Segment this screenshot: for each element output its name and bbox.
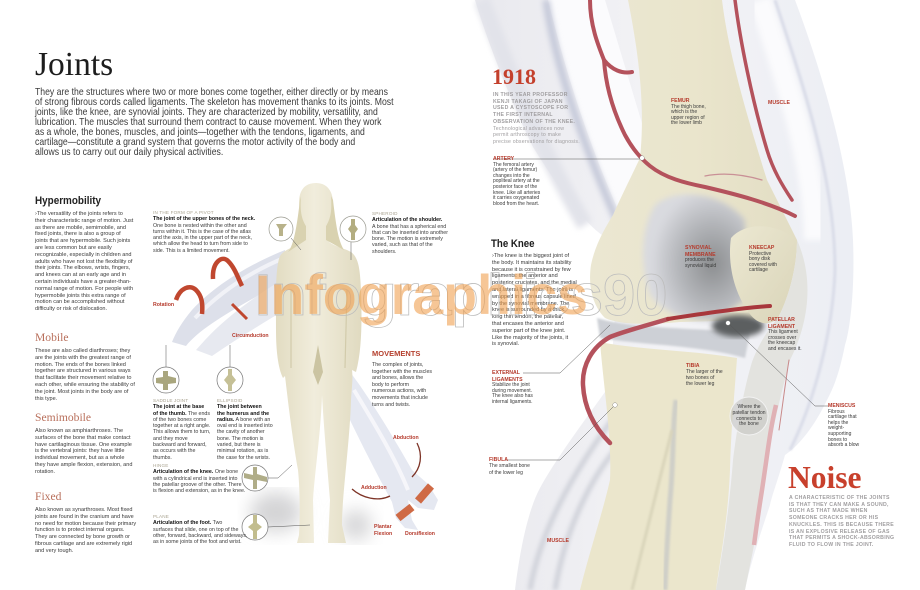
icon: plane joint circle	[242, 514, 268, 540]
label: tendon callout: the bone	[739, 421, 759, 427]
label: artery: ARTERY	[493, 156, 514, 162]
text: Hypermobility: their characteristic range of motion. Just	[35, 218, 133, 224]
label: artery	[493, 156, 540, 207]
text: ellipsoid joint: the humerus and the	[217, 411, 269, 417]
text: The Knee: Like the majority of the joints, it	[492, 335, 568, 341]
text: spheroid joint: A bone that has a spherical end	[372, 224, 446, 230]
text: Hypermobility: their joints. The elbows, wrists, fingers,	[35, 265, 130, 271]
text: The Knee: by the synovial membrane. The	[492, 301, 569, 307]
text: pivot joint: One bone is nested within the other and	[153, 223, 247, 229]
text: saddle joint: This allows them to turn,	[153, 429, 210, 435]
label: external ligaments: Stabilize the joint	[492, 382, 530, 388]
label: meniscus: supporting	[828, 431, 851, 437]
text: Semimobile: Also known as amphiarthroses. The	[35, 428, 123, 434]
text: plane joint: as in some joints of the foot and wrist.	[153, 539, 242, 545]
text: Hypermobility: adults who have not lost the flexibility of	[35, 259, 132, 265]
leaders	[166, 238, 351, 527]
label: tendon callout: patellar tendon	[732, 410, 766, 416]
text: ellipsoid joint: varied, but there is	[217, 442, 261, 448]
text: Movements: together with the muscles	[372, 369, 432, 375]
knee: arteries	[583, 0, 795, 443]
label: kneecap	[749, 245, 777, 273]
text: hinge joint: Articulation of the knee. One bone	[153, 469, 238, 475]
text: ellipsoid joint: bone. The motion is	[217, 436, 263, 442]
text: The Knee: and lateral ligaments. The joint is	[492, 287, 573, 293]
label: femur	[671, 98, 706, 126]
title: Joints	[35, 46, 113, 83]
icon: hinge joint circle	[242, 465, 268, 491]
text: Semimobile: have cartilaginous tissue. One example	[35, 442, 132, 448]
label: patellar ligament	[768, 317, 802, 352]
text: Hypermobility: normal range of motion. For people with	[35, 286, 133, 292]
text: Hypermobility: certain individuals have a greater-than-	[35, 279, 131, 285]
label: meniscus: helps the	[828, 420, 848, 426]
text: 1918	[493, 92, 580, 145]
text: Mobile: These are also called diarthroses; they	[35, 348, 130, 354]
label: synovial membrane: MEMBRANE	[685, 252, 716, 258]
label: tibia: The larger of the	[686, 369, 723, 375]
icon: spheroid joint circle	[340, 216, 366, 242]
label: femur: which is the	[671, 109, 697, 115]
text: saddle joint: of the two bones come	[153, 417, 206, 423]
text: 1918: KENJI TAKAGI OF JAPAN	[493, 99, 563, 105]
intro text: joints, like the knee, are synovial joints. They are characterized by mobility, versatility, and	[35, 106, 378, 118]
text: The Knee: superior part of the knee joint.	[492, 328, 565, 334]
label: patellar ligament: and encases it.	[768, 346, 802, 352]
text: Fixed: Also known as synarthroses. Most fixed	[35, 507, 132, 513]
heading: The Knee: The Knee	[491, 238, 535, 250]
label: artery: changes into the	[493, 173, 530, 179]
text: 1918: Technological advances now	[493, 126, 564, 132]
label: meniscus: absorb a blow	[828, 442, 859, 448]
intro text: as a whole, the bones, muscles, and joints—together with the tendons, ligaments, and	[35, 126, 365, 138]
text: The Knee: wrapped in a fibrous capsule lined	[492, 294, 576, 300]
label: kneecap: covered with	[749, 262, 777, 268]
label: artery: it carries oxygenated	[493, 195, 539, 201]
text: hinge joint: HINGE	[153, 463, 169, 468]
text: pivot joint: IN THE FORM OF A PIVOT	[153, 210, 214, 215]
text: Fixed: joints are found in the cranium and have	[35, 514, 134, 520]
text: Hypermobility: recognizable, especially in children and	[35, 252, 132, 258]
text: Semimobile: they have ample flexion, extension, and	[35, 462, 132, 468]
heading: Semimobile: Semimobile	[35, 411, 91, 424]
text: Noise: A CHARACTERISTIC OF THE JOINTS	[789, 495, 890, 501]
label: femur: FEMUR	[671, 98, 689, 104]
label: femur: the lower limb	[671, 120, 702, 126]
text: Semimobile: rotation.	[35, 469, 55, 475]
label: kneecap: Protective	[749, 251, 771, 257]
label: muscle top: MUSCLE	[768, 100, 790, 106]
text: 1918: permit arthroscopy to make	[493, 132, 561, 138]
heading: Movements: MOVEMENTS	[372, 349, 420, 358]
label: synovial membrane: synovial liquid	[685, 263, 716, 269]
label: external ligaments	[492, 370, 533, 405]
text: 1918: THE FIRST INTERNAL	[493, 112, 553, 118]
text: 1918: OBSERVATION OF THE KNEE.	[493, 119, 575, 125]
text: spheroid joint: varied, such as that of the	[372, 242, 433, 248]
text: saddle joint	[153, 398, 210, 461]
label: tibia: two bones of	[686, 375, 714, 381]
text: Hypermobility: and knees can at an early age and in	[35, 272, 126, 278]
text: plane joint: PLANE	[153, 514, 169, 519]
text: plane joint: Articulation of the foot. Two	[153, 520, 222, 526]
label: synovial membrane	[685, 245, 716, 269]
heading: Noise: Noise	[788, 460, 862, 495]
label: Plantar Flexion: Flexion	[374, 531, 392, 537]
knee: kneecap	[730, 226, 797, 323]
label: patellar ligament: LIGAMENT	[768, 324, 795, 330]
label: artery: The femoral artery	[493, 162, 534, 168]
label: meniscus	[828, 403, 860, 448]
text: Hypermobility: ›The versatility of the joints refers to	[35, 211, 123, 217]
text: spheroid joint: shoulders.	[372, 249, 396, 255]
knee: dark space behind kneecap	[712, 315, 764, 337]
label: artery: knee. Like all arteries	[493, 190, 540, 196]
label: external ligaments: during movement.	[492, 388, 532, 394]
icon: foot bars	[398, 486, 431, 518]
text: Movements: The complex of joints,	[372, 362, 424, 368]
text: Mobile	[35, 348, 135, 402]
text: Mobile: are the joints with the greatest range of	[35, 355, 131, 361]
text: Noise: SUCH AS THAT MADE WHEN	[789, 508, 868, 514]
text: Hypermobility: as there are mobile, semimobile, and	[35, 225, 126, 231]
intro text: lubrication. The muscles that surround them contract to cause movement. When they work	[35, 116, 382, 128]
label: fibula: FIBULA	[489, 457, 508, 463]
label: meniscus: MENISCUS	[828, 403, 855, 409]
label: fibula: of the lower leg	[489, 470, 523, 476]
text: hinge joint: with a cylindrical end is inserted into	[153, 476, 238, 482]
label: synovial membrane: SYNOVIAL	[685, 245, 712, 251]
text: The Knee: long thin tendon, the patellar,	[492, 314, 563, 320]
label: patellar ligament: crosses over	[768, 335, 796, 341]
text: saddle joint: together at a right angle.	[153, 423, 210, 429]
figure: human body	[276, 183, 361, 543]
label: Adduction: Adduction	[361, 485, 387, 491]
label: artery: blood from the heart.	[493, 201, 539, 207]
intro text	[34, 86, 394, 158]
label: Plantar Flexion	[374, 524, 392, 537]
text: ellipsoid joint: minimal rotation, as is	[217, 448, 268, 454]
text: The Knee: the body. It maintains its stability	[492, 260, 571, 266]
heading: Fixed: Fixed	[35, 490, 61, 503]
label: femur: The thigh bone,	[671, 104, 706, 110]
text: Noise	[789, 495, 894, 548]
text: saddle joint: and they move	[153, 436, 188, 442]
watermark outline: Infographics90	[255, 263, 668, 328]
text: Movements	[372, 362, 432, 408]
text: Mobile: that facilitate their movement relative to	[35, 375, 132, 381]
label: patellar ligament: This ligament	[768, 329, 798, 335]
text: Noise: SOMEONE CRACKS HER OR HIS	[789, 515, 878, 521]
text: Hypermobility	[34, 211, 134, 312]
text: Mobile: each other, while ensuring the stability of	[35, 382, 135, 388]
label: external ligaments: The knee also has	[492, 393, 533, 399]
label: fibula: The smallest bone	[489, 463, 530, 469]
text: pivot joint: which allow the head to turn from side to	[153, 241, 248, 247]
label: patellar ligament: PATELLAR	[768, 317, 795, 323]
intro text: cartilage—constitute a grand system that governs the motor activity of the body and	[35, 136, 355, 148]
label: external ligaments: EXTERNAL	[492, 370, 520, 376]
label: synovial membrane: produces the	[685, 257, 714, 263]
label: tibia: the lower leg	[686, 381, 714, 387]
watermark: Infographics	[255, 264, 588, 326]
text: ellipsoid joint: The joint between	[217, 404, 262, 410]
text: Mobile: motion. The ends of the bones linked	[35, 362, 126, 368]
text: The Knee: is synovial.	[492, 341, 519, 347]
text: pivot joint: side. This is a limited movement.	[153, 248, 230, 254]
text: spheroid joint: that can be inserted into another	[372, 230, 448, 236]
label: tibia	[686, 363, 723, 387]
heading: 1918: 1918	[492, 64, 536, 89]
text: Movements: movements that include	[372, 395, 428, 401]
text: ellipsoid joint: ELLIPSOID	[217, 398, 243, 403]
text: plane joint	[153, 514, 248, 545]
label: tendon callout: Where the	[737, 404, 761, 410]
text: Fixed: and very tough.	[35, 548, 73, 554]
text: The Knee	[492, 253, 577, 347]
text: The Knee: that encases the anterior and	[492, 321, 564, 327]
icon: movement arrows	[352, 443, 420, 499]
heading: Hypermobility: Hypermobility	[35, 195, 101, 207]
text: Fixed: fibrous cartilage and are extremely rigid	[35, 541, 132, 547]
intro text: of strong fibrous cords called ligaments. The skeleton has movement thanks to its joints. Most	[35, 96, 394, 108]
text: saddle joint: SADDLE JOINT	[153, 398, 188, 403]
text: pivot joint: The joint of the upper bones of the neck.	[153, 216, 255, 222]
text: pivot joint	[153, 210, 255, 254]
knee: leader lines	[493, 159, 828, 460]
text: Hypermobility: are less common but are easily	[35, 245, 112, 251]
text: Semimobile: surfaces of the bone that make contact	[35, 435, 131, 441]
text: Movements: body to perform	[372, 382, 409, 388]
knee: meniscus band	[597, 318, 750, 358]
text: Noise: IS THAT THEY CAN MAKE A SOUND,	[789, 502, 889, 508]
text: Movements: numerous actions, with	[372, 388, 426, 394]
label: meniscus: weight-	[828, 425, 844, 431]
label: artery: (artery of the femur)	[493, 167, 537, 173]
text: ellipsoid joint: oval end is inserted into	[217, 423, 273, 429]
text: Noise: THAT PERMITS A SHOCK-ABSORBING	[789, 535, 894, 541]
label: artery: popliteal artery at the	[493, 178, 540, 184]
knee: femur bone	[590, 0, 797, 324]
text: ellipsoid joint: the cavity of another	[217, 429, 265, 435]
text: saddle joint: of the thumb. The ends	[153, 411, 210, 417]
label: kneecap: KNEECAP	[749, 245, 774, 251]
knee: tibia and fibula	[580, 342, 737, 590]
label: tibia: TIBIA	[686, 363, 700, 369]
label: fibula	[489, 457, 530, 476]
text: Hypermobility: hypermobile joints this extra range of	[35, 293, 126, 299]
text: hinge joint: the patellar groove of the other. There	[153, 482, 242, 488]
text: saddle joint: backward and forward,	[153, 442, 207, 448]
text: Movements: turns and twists.	[372, 402, 410, 408]
label: artery: posterior face of the	[493, 184, 537, 190]
label: Abduction: Abduction	[393, 435, 419, 441]
text: Noise: KNUCKLES. THIS IS BECAUSE THERE	[789, 522, 894, 528]
icon: ellipsoid joint circle	[217, 367, 243, 393]
text: Noise: FLUID TO FLOW IN THE JOINT.	[789, 542, 874, 548]
text: 1918: IN THIS YEAR PROFESSOR	[493, 92, 568, 98]
knee: tendon callout circle	[730, 397, 768, 435]
label: meniscus: cartilage that	[828, 414, 857, 420]
text: saddle joint: The joint at the base	[153, 404, 204, 410]
text: pivot joint: turns within it. This is the case of the atlas	[153, 229, 251, 235]
text: Hypermobility: difficulty or risk of dislocation.	[35, 306, 107, 312]
text: spheroid joint: bone. The motion is extremely	[372, 236, 443, 242]
text: Fixed: function is to protect internal organs.	[35, 527, 124, 533]
text: Mobile: the joint. Most joints in the body are of	[35, 389, 128, 395]
text: saddle joint: thumbs.	[153, 455, 172, 461]
text: Semimobile: individual movement, but as a whole	[35, 455, 124, 461]
text: hinge joint	[153, 463, 245, 494]
text: spheroid joint: Articulation of the shoulder.	[372, 217, 442, 223]
heading: Mobile: Mobile	[35, 331, 68, 344]
figure: ghost leg positions	[350, 372, 438, 530]
text: Semimobile: is the vertebral joints: they have little	[35, 448, 124, 454]
label: Dorsiflexion: Dorsiflexion	[405, 531, 435, 537]
knee: translucent muscle envelope	[475, 0, 853, 590]
text: Movements: and bones, allows the	[372, 375, 423, 381]
figure: ground shadow	[250, 492, 371, 540]
icon: rotation arrows	[176, 259, 247, 319]
text: 1918: USED A CYSTOSCOPE FOR	[493, 105, 568, 111]
figure: ghost arm positions	[172, 250, 288, 356]
knee: patellar ligament	[716, 240, 807, 590]
text: hinge joint: is flexion and extension, as in the knee.	[153, 488, 245, 494]
text: The Knee: because it is constrained by few	[492, 267, 571, 273]
text: The Knee: ›The knee is the biggest joint of	[492, 253, 569, 259]
text: Fixed	[34, 507, 136, 554]
label: femur: upper region of	[671, 115, 705, 121]
label: kneecap: bony disk	[749, 256, 770, 262]
label: tendon callout: connects to	[736, 416, 762, 422]
text: The Knee: ligaments: the anterior and	[492, 273, 558, 279]
knee: vein	[754, 405, 776, 545]
label: muscle bottom: MUSCLE	[547, 538, 569, 544]
text: Hypermobility: fixed joints, there is also a group of	[35, 231, 121, 237]
label: external ligaments: internal ligaments.	[492, 399, 533, 405]
text: 1918: precise observations for diagnosis.	[493, 139, 580, 145]
text: plane joint: other, forward, backward, and sideways,	[153, 533, 248, 539]
text: Hypermobility: motion can be accomplished without	[35, 299, 124, 305]
text: plane joint: surfaces that slide, one on top of the	[153, 527, 238, 533]
label: kneecap: cartilage	[749, 267, 768, 273]
text: ellipsoid joint	[217, 398, 273, 461]
icon: pivot joint circle	[269, 217, 293, 241]
text: The Knee: knee is surrounded by a thick,	[492, 307, 566, 313]
label: Plantar Flexion: Plantar	[374, 524, 392, 530]
label: meniscus: bones to	[828, 437, 847, 443]
text: Mobile: together are structured in various ways	[35, 368, 131, 374]
text: The Knee: posterior cruciates, and the medial	[492, 280, 577, 286]
knee: joint gap	[643, 194, 745, 320]
text: ellipsoid joint: radius. A bone with an	[217, 417, 270, 423]
text: saddle joint: as occurs with the	[153, 448, 195, 454]
text: spheroid joint: SPHEROID	[372, 211, 398, 216]
text: Mobile: this type.	[35, 396, 57, 402]
intro text: allows us to carry out our daily physical activities.	[35, 146, 223, 158]
text: pivot joint: and the axis, in the upper part of the neck,	[153, 235, 252, 241]
icon: saddle joint circle	[153, 367, 179, 393]
text: spheroid joint	[372, 211, 448, 255]
text: ellipsoid joint: the case for the wrists.	[217, 455, 270, 461]
label: tendon callout	[732, 404, 766, 427]
intro text: They are the structures where two or more bones come together, either directly or by means	[35, 86, 388, 98]
label: patellar ligament: the kneecap	[768, 340, 795, 346]
text: Fixed: They are connected by bone growth or	[35, 534, 130, 540]
text: Noise: IS AN EXPLOSIVE RELEASE OF GAS	[789, 529, 890, 535]
label: external ligaments: LIGAMENTS	[492, 377, 523, 383]
knee: marker dots	[613, 156, 730, 407]
text: Fixed: no need for motion because their primary	[35, 521, 136, 527]
label: meniscus: Fibrous	[828, 409, 845, 415]
text: Semimobile	[35, 428, 132, 475]
text: Hypermobility: joints that are hypermobile. Such joints	[35, 238, 130, 244]
label: Rotation: Rotation	[153, 302, 174, 308]
label: Circumduction: Circumduction	[232, 333, 269, 339]
